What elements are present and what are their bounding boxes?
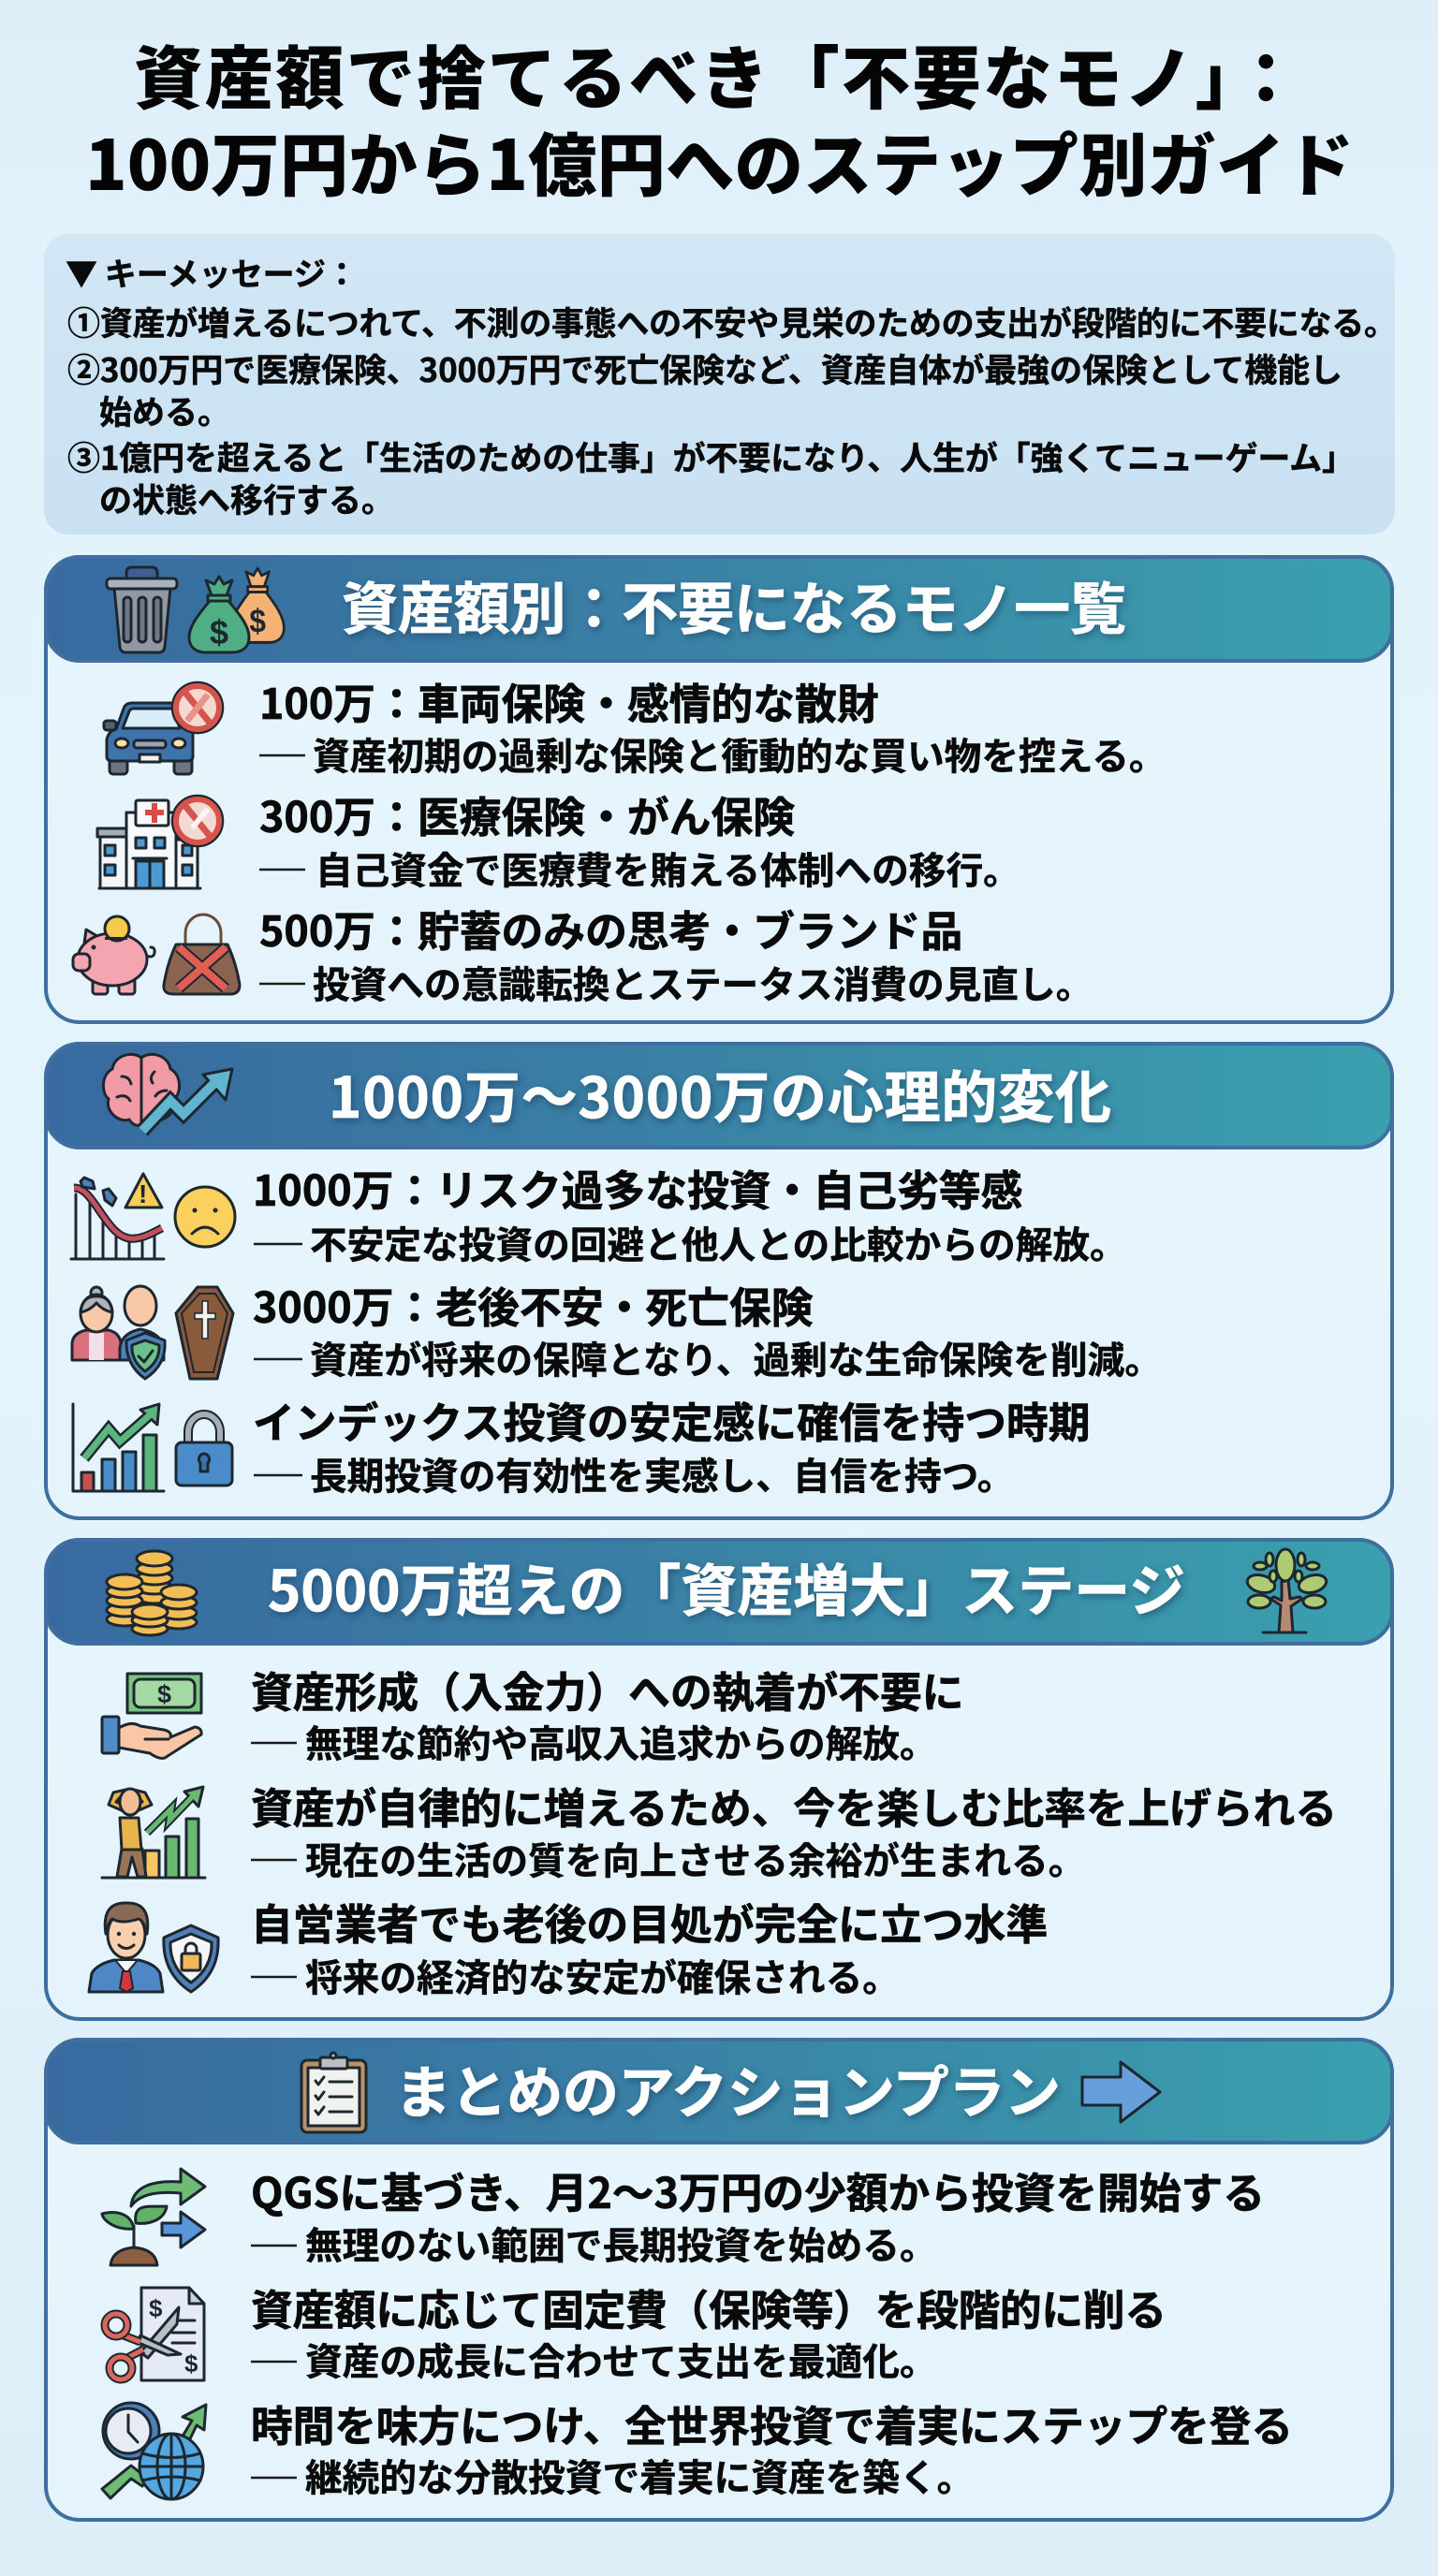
row: self-employed: 将来の経済的な安定が確保される。 (305, 1949, 900, 2002)
row: 300万: 自己資金で医療費を賄える体制への移行。 (315, 842, 1020, 895)
row: fixed costs (105, 2276, 1167, 2386)
icon: money bags: $ (210, 613, 228, 651)
row: 500万: 500万：貯蓄のみの思考・ブランド品 (259, 898, 962, 959)
icon: clock, globe and arrow (102, 2403, 206, 2499)
row: 1000万 (71, 1157, 1127, 1269)
row: 1000万: 1000万：リスク過多な投資・自己劣等感 (253, 1157, 1022, 1218)
row: index investing (73, 1389, 1091, 1500)
icon: trash can (107, 567, 177, 652)
row: capital formation (102, 1659, 964, 1768)
row: fixed costs: 資産額に応じて固定費（保険等）を段階的に削る (251, 2276, 1167, 2337)
row: autonomous growth (102, 1775, 1337, 1885)
panel: over 50 million stage (46, 1540, 1392, 2019)
key message text: 始める。 (99, 387, 230, 434)
row: autonomous growth: 資産が自律的に増えるため、今を楽しむ比率を上げられる (251, 1775, 1337, 1836)
panel: key message (44, 234, 1397, 534)
icon: tree (1245, 1549, 1328, 1632)
row: 1000万: 不安定な投資の回避と他人との比較からの解放。 (310, 1216, 1127, 1269)
icon: sprout with arrows (102, 2169, 205, 2265)
key message text: ②300万円で医療保険、3000万円で死亡保険など、資産自体が最強の保険として機能し (67, 344, 1343, 392)
panel: amounts list (46, 557, 1392, 1022)
key message text (67, 298, 1397, 522)
icon: hand with banknote: $ (157, 1680, 171, 1708)
row: self-employed: 自営業者でも老後の目処が完全に立つ水準 (251, 1891, 1048, 1952)
row: QGS: 無理のない範囲で長期投資を始める。 (305, 2217, 937, 2270)
row: 100万: 100万：車両保険・感情的な散財 (259, 670, 879, 731)
panel: psychological change (46, 1044, 1392, 1518)
icon: hospital with no sign (97, 796, 223, 888)
icon: car with no sign (104, 682, 223, 774)
row: index investing: インデックス投資の安定感に確信を持つ時期 (253, 1389, 1091, 1450)
row: fixed costs: 資産の成長に合わせて支出を最適化。 (305, 2333, 937, 2386)
icon: relaxing person with chart (102, 1787, 205, 1878)
row: 500万: 投資への意識転換とステータス消費の見直し。 (313, 956, 1093, 1009)
row: QGS: QGSに基づき、月2〜3万円の少額から投資を開始する (251, 2159, 1265, 2220)
icon: hand with banknote (102, 1674, 201, 1758)
title (85, 24, 1354, 211)
icon: scissors cutting a bill: $ (184, 2349, 198, 2378)
row: capital formation: 無理な節約や高収入追求からの解放。 (305, 1715, 937, 1768)
icon: scissors cutting a bill: $ (149, 2294, 163, 2322)
panel header: 資産額別：不要になるモノ一覧 (342, 564, 1126, 646)
icon: money bags: $ (249, 604, 266, 640)
row: 500万 (73, 898, 1093, 1009)
title: 100万円から1億円へのステップ別ガイド (85, 111, 1354, 211)
panel header (46, 2040, 1392, 2143)
row: 300万 (97, 783, 1020, 895)
row: 3000万: 資産が将来の保障となり、過剰な生命保険を削減。 (310, 1331, 1162, 1384)
panel header (46, 1044, 1392, 1148)
row: time and global investing (102, 2393, 1293, 2502)
icon: growth chart and lock (73, 1404, 232, 1491)
title: 資産額で捨てるべき「不要なモノ」： (134, 24, 1300, 124)
icon: businessman with shield (89, 1903, 218, 1992)
icon: roller coaster, warning, sad face (71, 1174, 235, 1259)
panel header (46, 557, 1392, 661)
icon: money bags (189, 568, 284, 652)
panel header (46, 1540, 1392, 1644)
row: 100万: 資産初期の過剰な保険と衝動的な買い物を控える。 (313, 727, 1167, 781)
row: index investing: 長期投資の有効性を実感し、自信を持つ。 (310, 1447, 1014, 1500)
panel header: 5000万超えの「資産増大」ステージ (268, 1546, 1185, 1628)
key message heading: ▼ キーメッセージ： (66, 249, 358, 295)
icon: brain with arrow (103, 1054, 232, 1131)
panel header: 1000万〜3000万の心理的変化 (329, 1053, 1111, 1134)
icon: scissors cutting a bill (105, 2288, 204, 2380)
row: 3000万 (72, 1274, 1162, 1384)
key message text: ③1億円を超えると「生活のための仕事」が不要になり、人生が「強くてニューゲーム」 (67, 432, 1355, 480)
key message text: の状態へ移行する。 (99, 475, 394, 522)
icon: piggy bank and handbag (73, 915, 240, 994)
row: autonomous growth: 現在の生活の質を向上させる余裕が生まれる。 (305, 1832, 1085, 1885)
panel header: まとめのアクションプラン (395, 2048, 1061, 2130)
row: 300万: 300万：医療保険・がん保険 (259, 783, 795, 844)
icon: arrow right (1082, 2062, 1160, 2122)
panel: action plan (46, 2040, 1392, 2520)
row: capital formation: 資産形成（入金力）への執着が不要に (251, 1659, 964, 1720)
icon: coin stacks (107, 1551, 197, 1635)
row: 100万 (104, 670, 1167, 781)
row: QGS (102, 2159, 1265, 2270)
icon: clipboard (301, 2053, 366, 2132)
icon: roller coaster, warning, sad face: ! (139, 1179, 147, 1208)
key message text: ①資産が増えるにつれて、不測の事態への不安や見栄のための支出が段階的に不要になる。 (67, 298, 1397, 345)
icon: elderly couple, shield, coffin (72, 1286, 233, 1379)
row: time and global investing: 継続的な分散投資で着実に資産を築く。 (305, 2449, 974, 2502)
row: time and global investing: 時間を味方につけ、全世界投資で着実にステップを登る (251, 2393, 1293, 2453)
row: 3000万: 3000万：老後不安・死亡保険 (253, 1274, 814, 1335)
row: self-employed (89, 1891, 1048, 2002)
